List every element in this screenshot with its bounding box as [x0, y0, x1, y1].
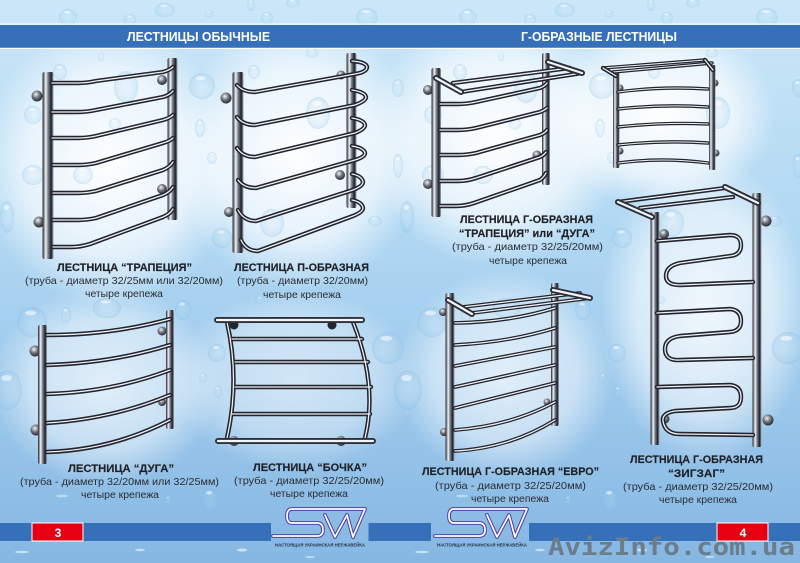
water drops: left page — [0, 0, 404, 558]
header band — [0, 24, 800, 49]
label: P-shaped: четыре крепежа — [263, 290, 341, 301]
label: arc: (труба - диаметр 32/20мм или 32/25мм) — [20, 476, 219, 488]
water drops: right page — [394, 0, 800, 558]
page number 4: 4 — [740, 526, 747, 540]
label: arc — [20, 463, 219, 501]
label: trapezoid — [25, 262, 223, 300]
label: L-shaped trapezoid or arc: (труба - диаметр 32/25/20мм) — [452, 241, 603, 253]
towel rail: barrel — [217, 320, 373, 446]
label: barrel — [234, 462, 384, 500]
logo: SW right — [435, 509, 528, 548]
label: zigzag: ЛЕСТНИЦА Г-ОБРАЗНАЯ — [630, 454, 763, 466]
label: trapezoid: ЛЕСТНИЦА “ТРАПЕЦИЯ” — [57, 262, 192, 274]
label: P-shaped: (труба - диаметр 32/20мм) — [237, 275, 368, 287]
heading: right page: Г-ОБРАЗНЫЕ ЛЕСТНИЦЫ — [521, 29, 677, 44]
label: barrel: ЛЕСТНИЦА “БОЧКА” — [253, 462, 367, 474]
towel rail: zigzag — [618, 187, 774, 447]
label: arc: ЛЕСТНИЦА “ДУГА” — [68, 463, 174, 475]
label: P-shaped: ЛЕСТНИЦА П-ОБРАЗНАЯ — [234, 262, 369, 274]
label: zigzag: (труба - диаметр 32/25/20мм) — [623, 481, 773, 493]
label: trapezoid: (труба - диаметр 32/25мм или 32/20мм) — [25, 275, 223, 287]
label: zigzag: четыре крепежа — [659, 495, 737, 506]
label: L-shaped trapezoid or arc — [452, 214, 603, 267]
watermark: AvizInfo.com.ua — [548, 533, 795, 561]
page number 3 — [32, 523, 83, 541]
label: barrel: четыре крепежа — [270, 489, 348, 500]
page number 4 — [717, 523, 768, 541]
towel rail: P-shaped — [220, 53, 367, 253]
page number 3: 3 — [55, 526, 62, 540]
label: euro — [422, 466, 599, 505]
label: euro: четыре крепежа — [471, 494, 549, 505]
label: trapezoid: четыре крепежа — [85, 289, 163, 300]
towel rail: trapezoid — [32, 58, 178, 259]
label: L-shaped trapezoid or arc: ЛЕСТНИЦА Г-ОБРАЗНАЯ — [460, 214, 593, 226]
label: zigzag: “ЗИГЗАГ” — [668, 468, 725, 480]
towel rail: arc — [30, 310, 174, 464]
towel rail: L-shaped arc small — [603, 60, 720, 170]
logo: SW left — [273, 509, 366, 548]
towel rail: euro — [439, 283, 590, 461]
label: euro: (труба - диаметр 32/25/20мм) — [435, 480, 586, 492]
label: L-shaped trapezoid or arc: четыре крепежа — [489, 256, 567, 267]
footer band — [0, 523, 800, 541]
label: barrel: (труба - диаметр 32/25/20мм) — [234, 475, 384, 487]
label: arc: четыре крепежа — [81, 490, 159, 501]
label: P-shaped — [234, 262, 369, 301]
towel rail: L-shaped trapezoid with shelf — [423, 53, 582, 217]
heading: left page: ЛЕСТНИЦЫ ОБЫЧНЫЕ — [127, 29, 270, 44]
label: euro: ЛЕСТНИЦА Г-ОБРАЗНАЯ “ЕВРО” — [422, 466, 599, 478]
label: L-shaped trapezoid or arc: “ТРАПЕЦИЯ” или “ДУГА” — [459, 228, 595, 240]
label: zigzag — [623, 454, 773, 506]
